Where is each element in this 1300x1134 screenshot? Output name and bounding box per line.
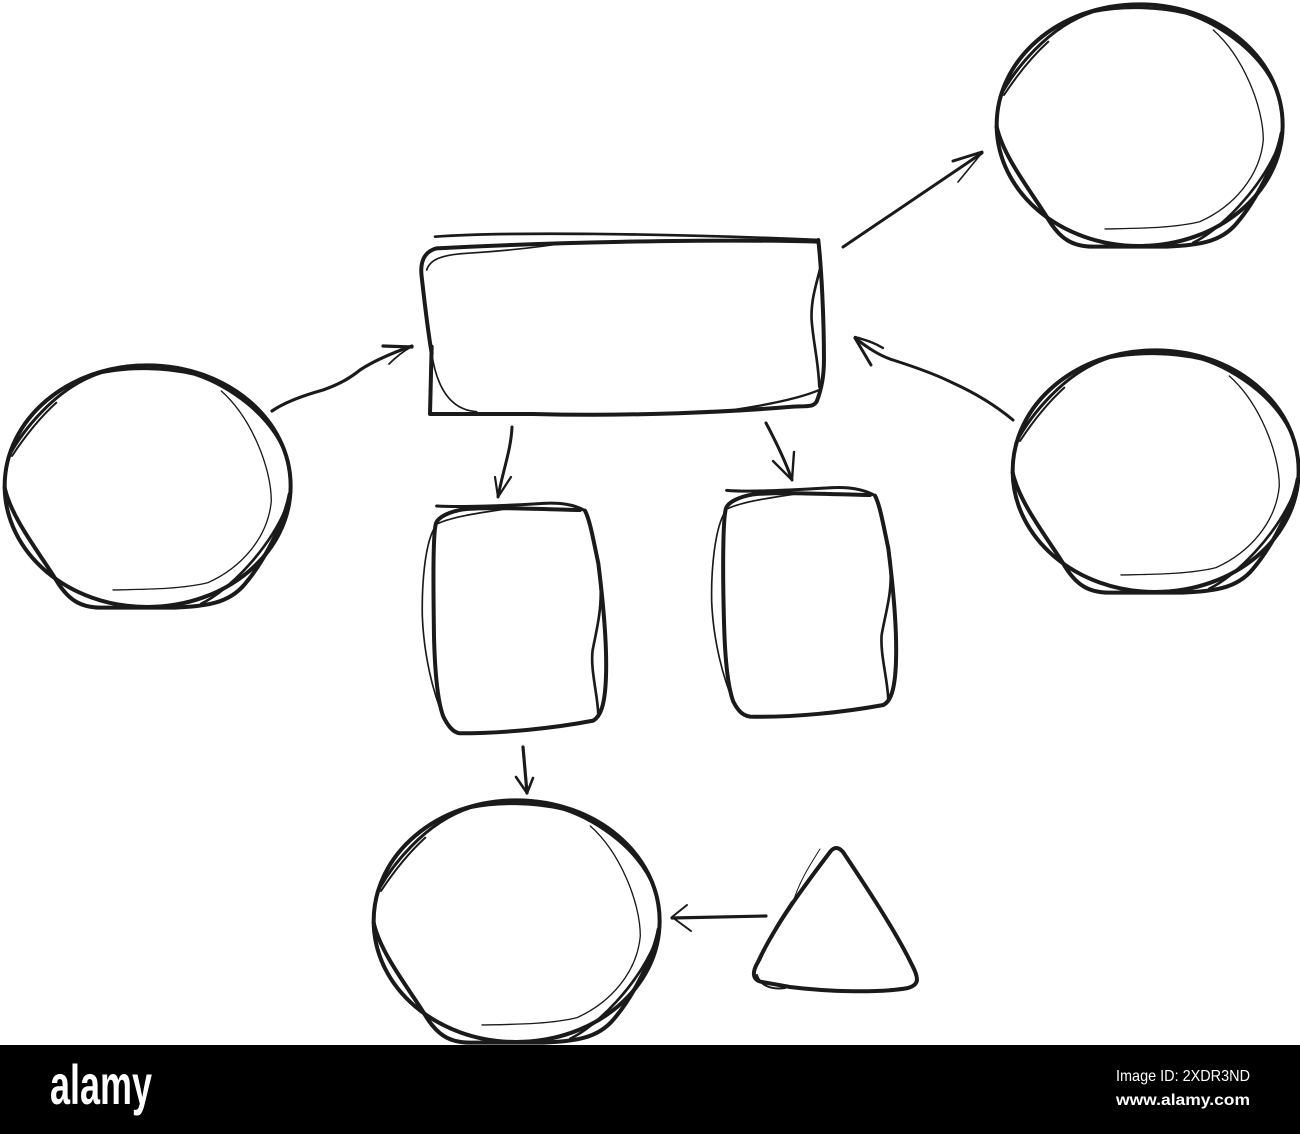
triangle <box>754 848 917 991</box>
arrow: left circle to main rectangle <box>272 346 412 411</box>
arrow: main rectangle to lower left rectangle <box>495 427 512 497</box>
arrow: main rectangle to lower right rectangle <box>766 423 794 480</box>
circle: top right <box>997 4 1283 247</box>
footer band <box>0 1045 1300 1134</box>
arrow: lower left rectangle to bottom circle <box>516 747 533 793</box>
logo: alamy: alamy <box>50 1053 152 1116</box>
arrow: right circle to main rectangle <box>855 337 1013 420</box>
circle: bottom <box>374 800 660 1043</box>
circle: right <box>1013 350 1299 593</box>
arrow: triangle to bottom circle <box>672 905 766 931</box>
rectangle: lower right <box>712 488 896 717</box>
image id: Image ID: 2XDR3ND <box>1116 1068 1250 1085</box>
circle: left <box>5 365 291 608</box>
main rectangle <box>421 234 824 415</box>
arrow: main rectangle to top right circle <box>843 152 982 247</box>
website: www.alamy.com <box>1115 1092 1250 1109</box>
rectangle: lower left <box>422 503 606 733</box>
